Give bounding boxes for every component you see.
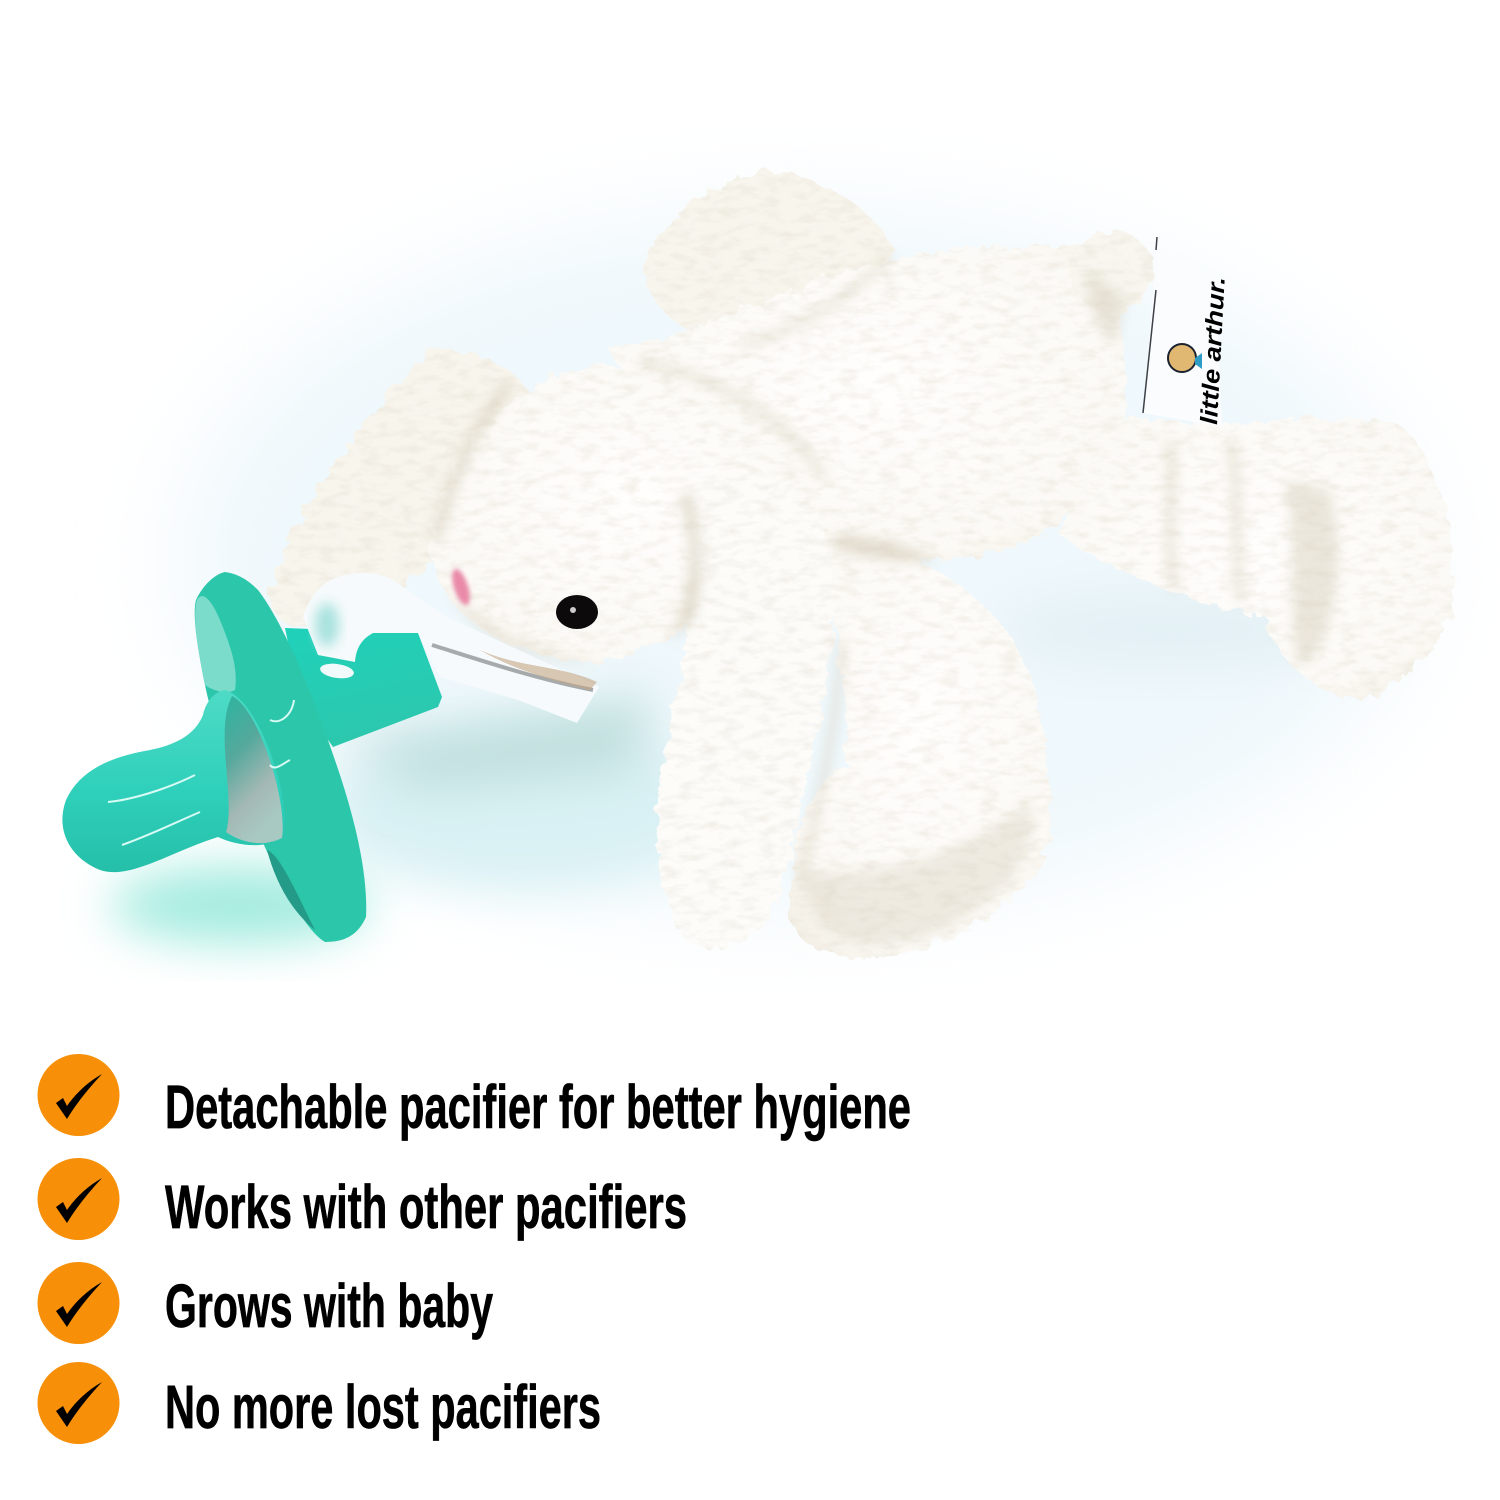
feature 2: [38, 1158, 687, 1241]
feature text 2: Works with other pacifiers: [165, 1173, 687, 1241]
label tag: [1143, 237, 1231, 427]
soft blue product shadow: [110, 210, 1420, 943]
pacifier: nipple: [62, 690, 285, 872]
pacifier: nipple collar: [225, 696, 283, 843]
product photo: plush bunny with pacifier: [62, 171, 1454, 958]
pacifier: shield inner face: [195, 596, 236, 692]
pacifier: loop hole: [319, 662, 355, 680]
icon: check badge 3: [38, 1262, 120, 1344]
velcro strap: [303, 573, 599, 723]
feature 3: [38, 1262, 493, 1344]
icon: check badge 2: [38, 1158, 120, 1240]
feature 4: [38, 1362, 601, 1444]
label tag: little arthur.: [1196, 276, 1231, 425]
bunny: back ear: [269, 351, 530, 625]
feature text 1: Detachable pacifier for better hygiene: [165, 1073, 911, 1141]
bunny: eye: [556, 595, 598, 629]
feature text 3: Grows with baby: [165, 1272, 493, 1340]
bunny: nose: [448, 567, 474, 607]
pacifier: handle: [285, 628, 442, 747]
bunny: plush body: [269, 171, 1454, 958]
baby logo: [1168, 344, 1202, 372]
bunny: head: [430, 365, 821, 663]
bunny: front leg: [789, 530, 1050, 958]
bunny: front ear: [657, 472, 835, 948]
pacifier: slot shadow: [267, 850, 315, 930]
bunny: tail: [1070, 232, 1154, 312]
pacifier and strap: [62, 572, 599, 942]
feature 1: [38, 1054, 911, 1141]
icon: check badge 1: [38, 1054, 120, 1136]
bunny: right hind leg: [1060, 418, 1454, 699]
feature list: [38, 1054, 911, 1444]
bunny: upper hind leg: [642, 171, 895, 345]
icon: check badge 4: [38, 1362, 120, 1444]
pacifier: highlights: [108, 700, 294, 845]
bunny: shading: [436, 255, 1338, 944]
pacifier: shield: [195, 572, 366, 942]
feature text 4: No more lost pacifiers: [165, 1373, 601, 1441]
bunny: torso: [610, 245, 1125, 559]
